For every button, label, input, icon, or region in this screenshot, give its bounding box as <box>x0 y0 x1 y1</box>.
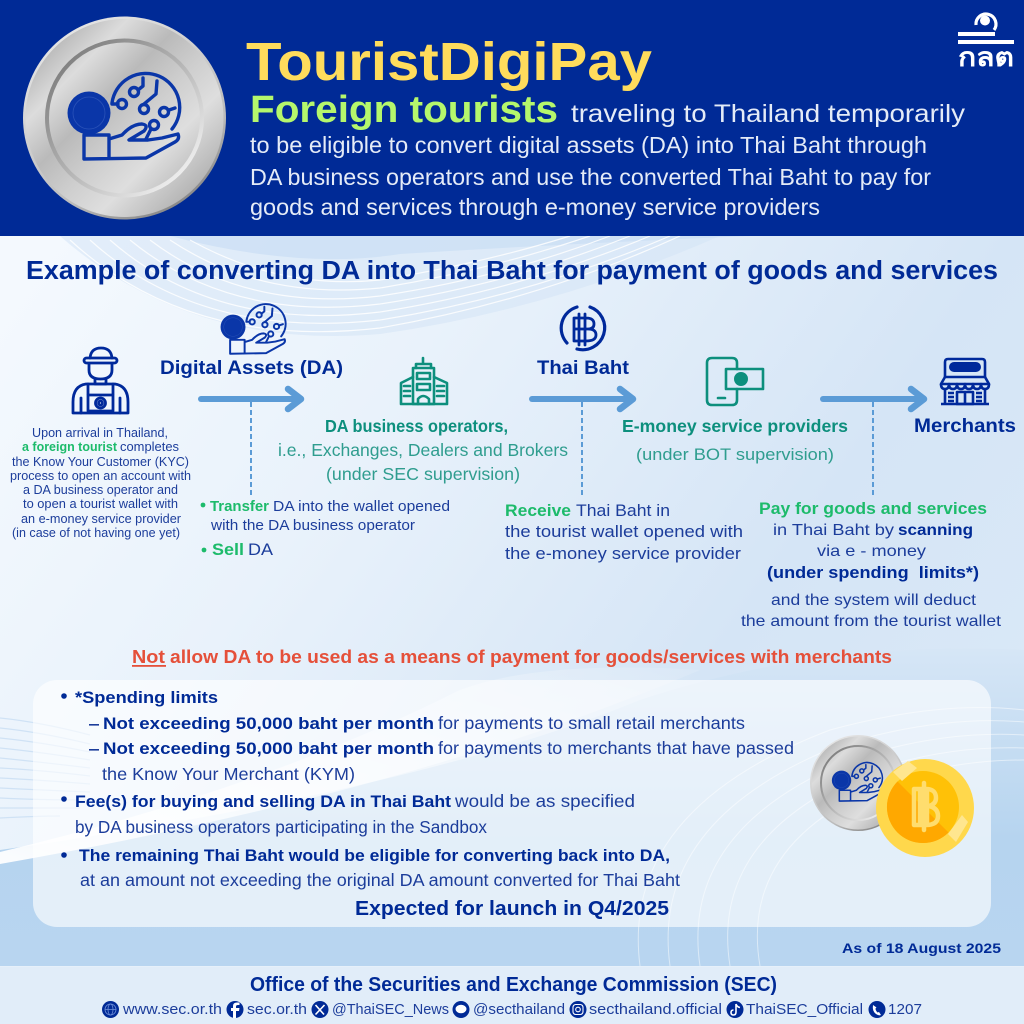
subtitle paragraph: to be eligible to convert digital assets (DA) into Thai Baht through <box>250 132 927 158</box>
text: remaining baht <box>61 847 680 890</box>
contact: website: www.sec.or.th <box>122 1001 222 1018</box>
warning: DA not allowed as payment: Not <box>132 647 165 667</box>
contact: line: @secthailand <box>473 1001 565 1018</box>
date note: As of 18 August 2025 <box>842 940 1001 956</box>
tourist description: Upon arrival in Thailand, <box>32 425 168 440</box>
icon: tourist with camera <box>73 348 128 413</box>
icon: Thai Baht symbol <box>561 307 605 350</box>
step details: transfer and sell <box>201 498 450 559</box>
header banner <box>0 0 1024 236</box>
step: e-money service providers <box>622 358 848 464</box>
icon: storefront <box>941 359 989 404</box>
contact: phone: 1207 <box>888 1001 922 1018</box>
tourist description: a DA business operator and <box>23 482 178 497</box>
step: DA business operators: (under SEC supervision) <box>326 464 520 484</box>
step: DA business operators: i.e., Exchanges, Dealers and Brokers <box>278 440 568 460</box>
tourist description: completes <box>120 439 179 454</box>
text: fees: by DA business operators participating in the Sandbox <box>75 817 487 837</box>
subtitle paragraph: traveling to Thailand temporarily <box>571 100 966 128</box>
page background <box>0 236 1024 966</box>
tourist description: process to open an account with <box>10 468 191 483</box>
step details: pay for goods and services: (under spending limits*) <box>767 563 979 582</box>
step details: receive: the e-money service provider <box>505 545 742 563</box>
text: fees: Fee(s) for buying and selling DA in Thai Baht <box>75 793 452 811</box>
arrow: e-money to merchants <box>823 389 924 495</box>
warning: DA not allowed as payment: allow DA to be used as a means of payment for goods/services with merchants <box>170 647 892 667</box>
step: merchants <box>914 359 1016 437</box>
step: foreign tourist <box>10 348 191 540</box>
step: DA business operators <box>278 358 568 484</box>
text: spending limits: *Spending limits <box>75 689 218 707</box>
contact: instagram: secthailand.official <box>589 1001 722 1018</box>
step details: pay for goods and services: the amount from the tourist wallet <box>741 613 1002 630</box>
step: e-money service providers: E-money service providers <box>622 416 848 436</box>
gold coin <box>876 759 974 857</box>
subtitle paragraph: DA business operators and use the converted Thai Baht to pay for <box>250 164 931 190</box>
step details: pay for goods and services: scanning <box>898 522 973 539</box>
step details: pay for goods and services: via e - money <box>817 543 926 560</box>
arrow: digital assets to operators <box>201 389 301 497</box>
step details: receive: Receive <box>505 502 571 520</box>
step details: transfer and sell: DA <box>248 540 274 559</box>
text: remaining baht: The remaining Thai Baht would be eligible for converting back into DA, <box>79 847 670 865</box>
subtitle paragraph: goods and services through e-money service providers <box>250 194 820 220</box>
SEC logo: กลต <box>958 42 1014 72</box>
label: Thai Baht: Thai Baht <box>537 358 630 379</box>
subtitle paragraph: Foreign tourists <box>250 89 558 131</box>
step details: receive: Thai Baht in <box>576 502 670 520</box>
subtitle paragraph <box>250 89 966 220</box>
step details: transfer and sell: DA into the wallet opened <box>273 498 450 515</box>
footer <box>0 967 1024 1024</box>
main heading: Example of converting DA into Thai Baht for payment of goods and services <box>26 257 998 285</box>
text: spending limits: for payments to merchants that have passed <box>438 738 794 758</box>
text: spending limits <box>61 689 794 784</box>
tourist description: a foreign tourist <box>22 439 118 454</box>
text: spending limits: the Know Your Merchant (KYM) <box>102 764 355 784</box>
text: spending limits: for payments to small retail merchants <box>438 713 745 733</box>
step details: pay for goods and services: and the system will deduct <box>771 592 977 609</box>
silver coin <box>810 735 906 831</box>
contact: tiktok: ThaiSEC_Official <box>746 1001 863 1018</box>
footer title: Office of the Securities and Exchange Commission (SEC) <box>250 973 777 996</box>
icon: phone and banknote <box>707 358 763 405</box>
contact: phone <box>868 1001 922 1018</box>
step: e-money service providers: (under BOT supervision) <box>636 445 834 464</box>
tourist description <box>10 425 191 540</box>
tourist description: to open a tourist wallet with <box>23 496 178 511</box>
step details: transfer and sell: with the DA business operator <box>210 517 415 534</box>
title: TouristDigiPay <box>246 32 652 92</box>
silver coin with digital asset icon <box>23 16 226 220</box>
tourist description: the Know Your Customer (KYC) <box>12 454 189 469</box>
step: merchants: Merchants <box>914 416 1016 437</box>
step details: transfer and sell: Sell <box>212 540 244 559</box>
contact: X: @ThaiSEC_News <box>332 1001 449 1018</box>
contact: facebook: sec.or.th <box>247 1001 307 1018</box>
step details: receive: the tourist wallet opened with <box>505 523 743 541</box>
tourist description: an e-money service provider <box>21 511 182 526</box>
text: spending limits: Not exceeding 50,000 baht per month <box>103 740 434 758</box>
step details: pay for goods and services: Pay for goods and services <box>759 499 987 518</box>
panel: conditions and limits <box>33 680 991 927</box>
text: remaining baht: at an amount not exceeding the original DA amount converted for Thai Baht <box>80 870 680 890</box>
label: Digital Assets: Digital Assets (DA) <box>160 358 343 379</box>
text: spending limits: Not exceeding 50,000 baht per month <box>103 715 434 733</box>
arrow: operators to e-money <box>532 389 633 497</box>
step details: transfer and sell: Transfer <box>210 498 269 515</box>
text: fees <box>61 791 635 837</box>
step: DA business operators: DA business operators, <box>325 416 508 436</box>
step details: receive <box>505 502 743 563</box>
step details: pay for goods and services <box>741 499 1002 630</box>
step details: pay for goods and services: in Thai Baht by <box>773 522 894 539</box>
icon: digital assets <box>221 304 286 354</box>
tourist description: (in case of not having one yet) <box>12 525 180 540</box>
icon: office building <box>401 358 447 404</box>
illustration: silver and gold coins <box>810 735 974 857</box>
text: fees: would be as specified <box>454 791 635 811</box>
SEC logo <box>958 14 1014 72</box>
launch date: Expected for launch in Q4/2025 <box>355 897 669 920</box>
